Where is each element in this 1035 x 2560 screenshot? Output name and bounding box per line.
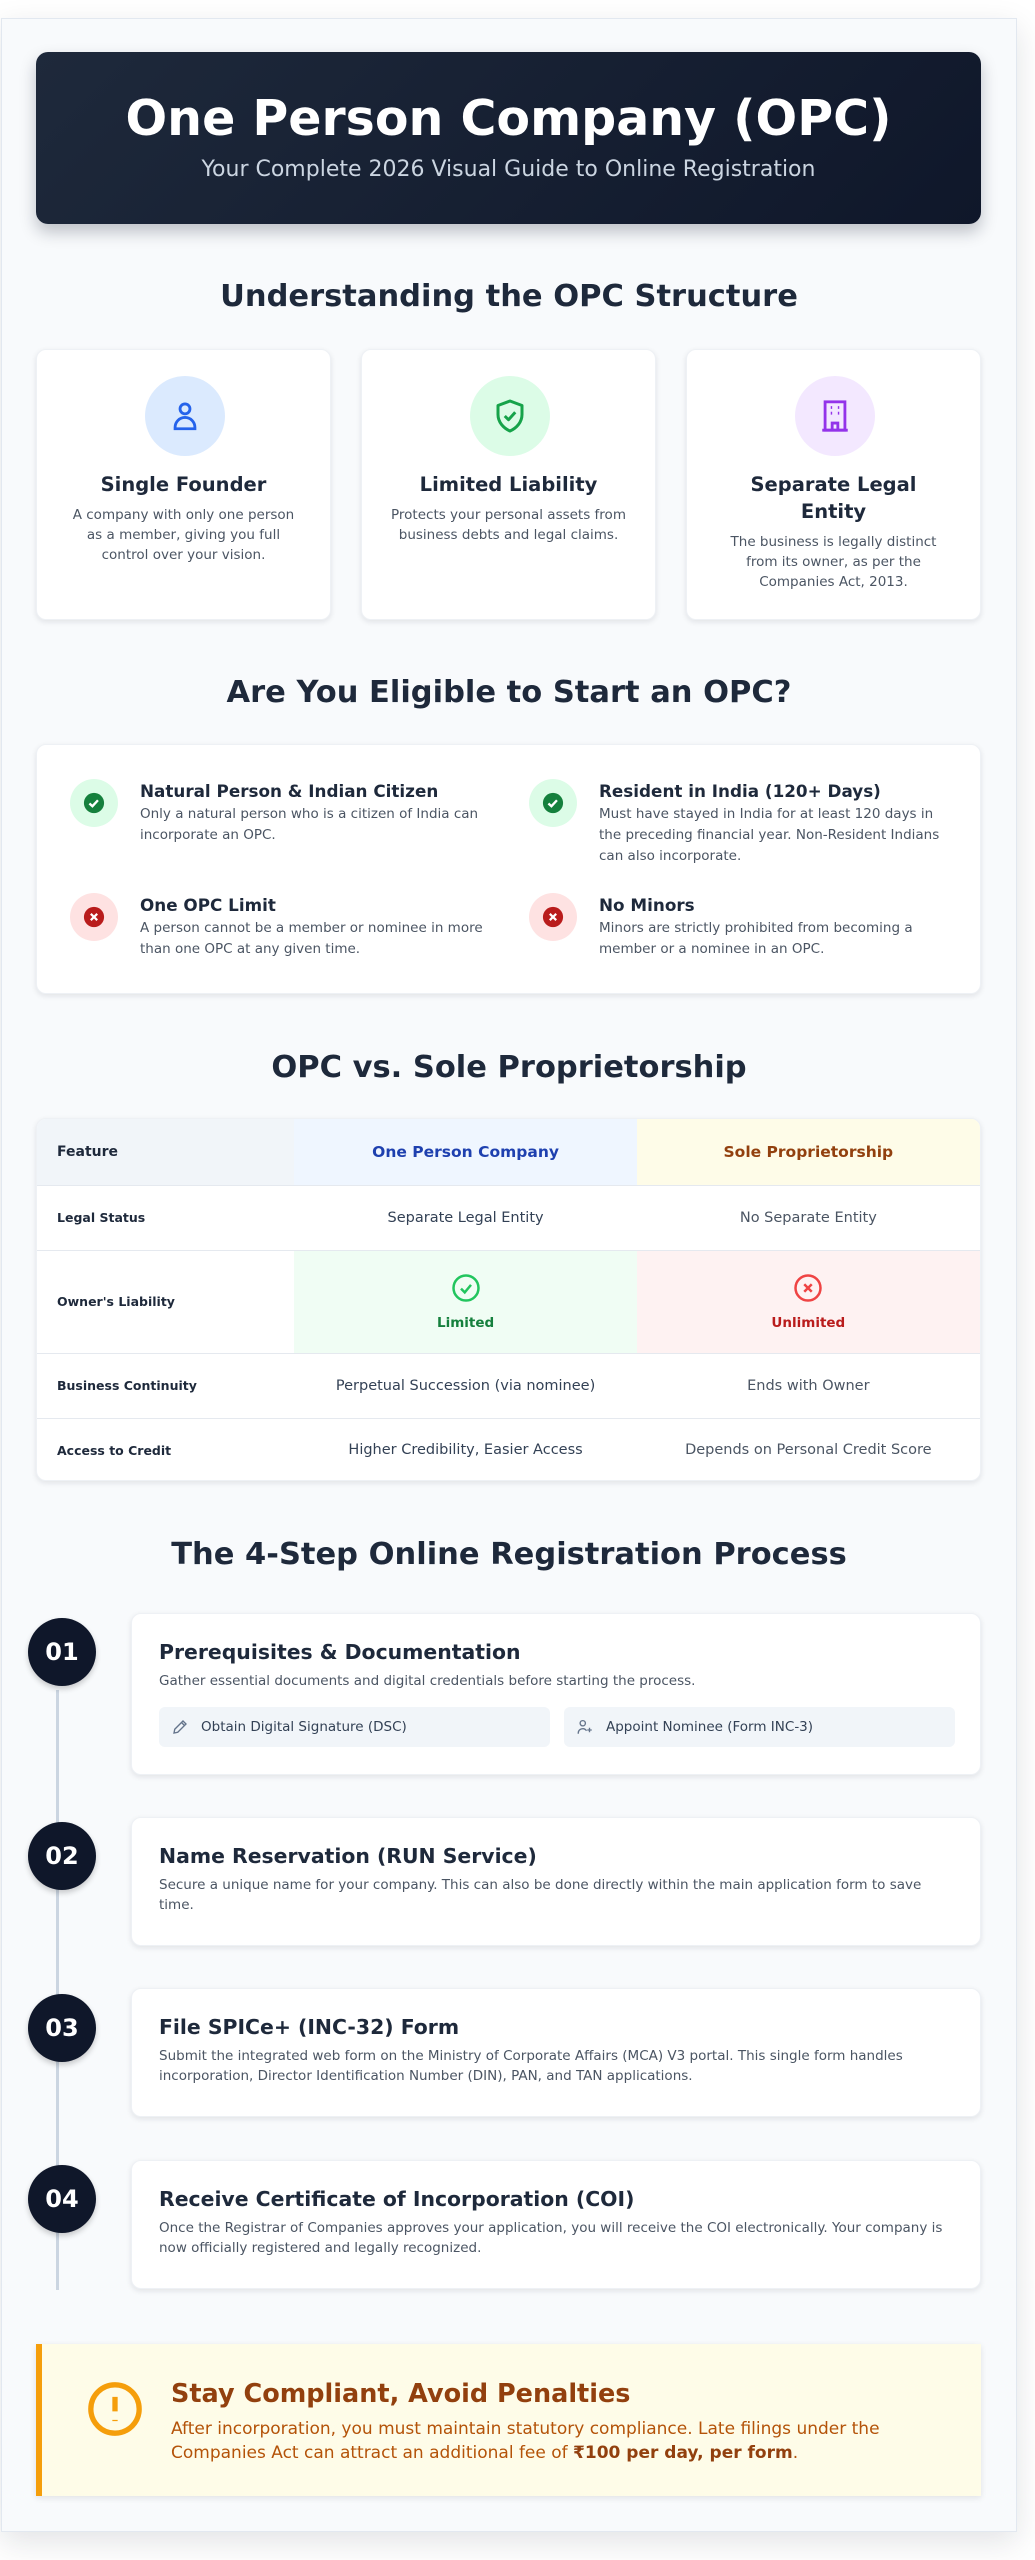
item: resident — [529, 779, 939, 864]
comparison table: Unlimited — [771, 1314, 845, 1330]
item: one opc limit: A person cannot be a member or nominee in more than one OPC at any given time. — [140, 920, 483, 957]
step 3 card: Submit the integrated web form on the Ministry of Corporate Affairs (MCA) V3 portal. This single form handles incorporation, Director Identification Number (DIN), PAN, and TAN applications. — [159, 2048, 903, 2084]
card: separate entity: Separate Legal — [751, 473, 916, 496]
card: separate entity: Entity — [801, 500, 866, 523]
heading: structure: Understanding the OPC Structure — [220, 279, 798, 314]
step 4 card: Receive Certificate of Incorporation (COI) — [159, 2187, 634, 2211]
step 4 card — [131, 2160, 981, 2289]
step 4 card: Once the Registrar of Companies approves your application, you will receive the COI electronically. Your company is now officially registered and legally recognized. — [159, 2220, 942, 2256]
comparison table: Sole Proprietorship — [724, 1143, 893, 1161]
step 1 number — [28, 1618, 96, 1686]
comparison table: Business Continuity — [57, 1378, 197, 1393]
comparison table: One Person Company — [372, 1143, 559, 1161]
item: one opc limit: One OPC Limit — [140, 895, 276, 915]
chip: DSC: Obtain Digital Signature (DSC) — [201, 1719, 407, 1735]
step 3 number: 03 — [45, 2014, 79, 2042]
item: no minors — [529, 893, 913, 957]
step 1 card: Prerequisites & Documentation — [159, 1640, 521, 1664]
comparison table: Owner's Liability — [57, 1294, 175, 1309]
step 2 card: Secure a unique name for your company. This can also be done directly within the main application form to save time. — [159, 1877, 921, 1913]
step 3 card — [131, 1988, 981, 2117]
item: no minors: No Minors — [599, 895, 695, 915]
step 4 number — [28, 2165, 96, 2233]
chip: nominee: Appoint Nominee (Form INC-3) — [606, 1719, 813, 1735]
comparison table — [36, 1118, 981, 1481]
step 1 card: Gather essential documents and digital credentials before starting the process. — [159, 1673, 695, 1689]
heading: eligibility: Are You Eligible to Start an OPC? — [227, 675, 791, 710]
timeline line — [56, 1690, 59, 2290]
heading: process: The 4-Step Online Registration Process — [171, 1537, 847, 1572]
step 1 card — [131, 1613, 981, 1775]
icon: person — [145, 376, 225, 456]
item: one opc limit — [70, 893, 483, 957]
step 2 number: 02 — [45, 1842, 79, 1870]
comparison table: Higher Credibility, Easier Access — [348, 1442, 583, 1458]
comparison table: Access to Credit — [57, 1443, 171, 1458]
step 2 number — [28, 1822, 96, 1890]
comparison table: Feature — [57, 1144, 118, 1160]
subtitle: Your Complete 2026 Visual Guide to Online Registration — [202, 157, 815, 182]
card: separate entity — [686, 349, 981, 620]
item: resident: Must have stayed in India for at least 120 days in the preceding financial year. Non-Resident Indians can also incorporate. — [599, 806, 939, 864]
comparison table: Separate Legal Entity — [388, 1210, 544, 1226]
comparison table: Limited — [437, 1314, 494, 1330]
icon: building — [795, 376, 875, 456]
item: no minors: Minors are strictly prohibited from becoming a member or a nominee in an OPC. — [599, 920, 913, 957]
callout text: After incorporation, you must maintain statutory compliance. Late filings under the Companies Act can attract an additional fee of ₹100 per day, per form. — [171, 2419, 880, 2463]
item: citizen: Natural Person & Indian Citizen — [140, 781, 438, 801]
comparison table: Perpetual Succession (via nominee) — [336, 1378, 595, 1394]
comparison table: No Separate Entity — [740, 1210, 877, 1226]
header banner — [36, 52, 981, 224]
icon: warning — [88, 2382, 142, 2436]
heading: comparison: OPC vs. Sole Proprietorship — [271, 1050, 747, 1085]
card: separate entity: The business is legally distinct from its owner, as per the Companies Act, 2013. — [731, 534, 936, 590]
step 3 card: File SPICe+ (INC-32) Form — [159, 2015, 459, 2039]
item: resident: Resident in India (120+ Days) — [599, 781, 881, 801]
step 2 card: Name Reservation (RUN Service) — [159, 1844, 537, 1868]
step 2 card — [131, 1817, 981, 1946]
title: One Person Company (OPC) — [126, 90, 891, 147]
card: limited liability: Protects your personal assets from business debts and legal claims. — [391, 507, 626, 543]
chip: nominee — [564, 1707, 955, 1747]
step 4 number: 04 — [45, 2185, 79, 2213]
item: citizen: Only a natural person who is a citizen of India can incorporate an OPC. — [140, 806, 478, 843]
callout: compliance — [36, 2344, 981, 2496]
step 1 number: 01 — [45, 1638, 79, 1666]
panel: eligibility — [36, 744, 981, 994]
card: single founder: Single Founder — [101, 473, 266, 496]
comparison table: Ends with Owner — [747, 1378, 870, 1394]
step 3 number — [28, 1994, 96, 2062]
card: limited liability — [361, 349, 656, 620]
card: single founder: A company with only one person as a member, giving you full control over your vision. — [73, 507, 294, 563]
card: limited liability: Limited Liability — [420, 473, 597, 496]
icon: shield — [470, 376, 550, 456]
card: single founder — [36, 349, 331, 620]
chip: DSC — [159, 1707, 550, 1747]
comparison table: Depends on Personal Credit Score — [685, 1442, 932, 1458]
callout title: Stay Compliant, Avoid Penalties — [171, 2379, 630, 2409]
item: citizen — [70, 779, 478, 843]
comparison table: Legal Status — [57, 1210, 145, 1225]
